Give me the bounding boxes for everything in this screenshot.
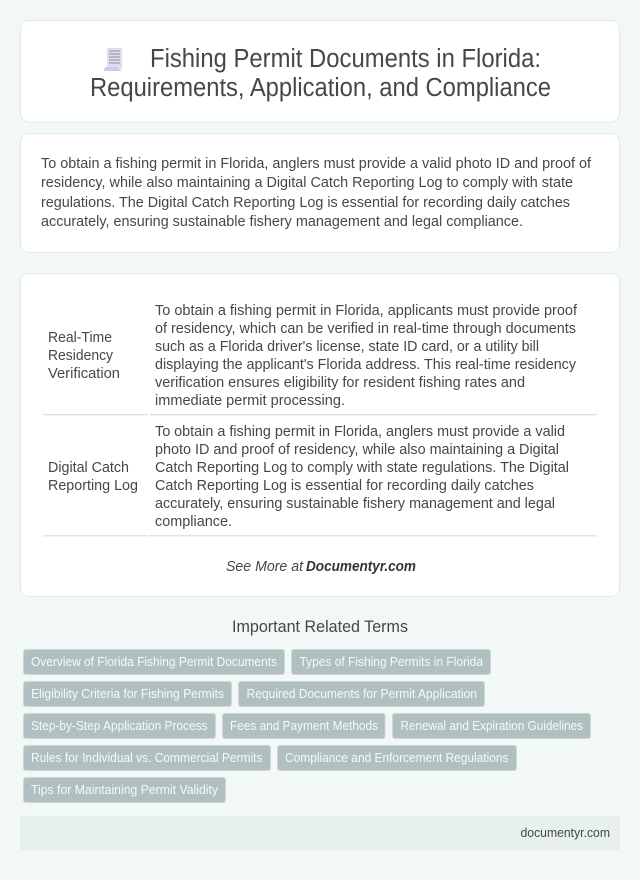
row description: To obtain a fishing permit in Florida, anglers must provide a valid <box>155 424 565 440</box>
row description <box>155 303 578 409</box>
tag <box>24 714 216 738</box>
footer bar: documentyr.com <box>520 826 610 840</box>
footer bar <box>20 816 620 850</box>
see more link: Documentyr.com <box>306 559 416 575</box>
panel: table card <box>20 274 620 596</box>
title <box>90 45 551 102</box>
tag: Tips for Maintaining Permit Validity <box>31 783 219 797</box>
icon: document scroll <box>104 48 122 71</box>
row label: Verification <box>48 366 120 382</box>
row description: displaying the applicant's Florida address. This real-time residency <box>155 357 577 373</box>
row label: Residency <box>48 348 114 364</box>
intro text <box>41 155 592 230</box>
tag <box>392 714 590 738</box>
intro text: regulations. The Digital Catch Reporting Log is essential for recording daily catches <box>41 194 570 211</box>
row description: of residency, which can be verified in real-time through documents <box>155 321 576 337</box>
panel: title card <box>20 20 620 122</box>
intro text: residency, while also maintaining a Digital Catch Reporting Log to comply with state <box>41 174 573 191</box>
row label: Digital Catch <box>48 460 129 476</box>
tag <box>278 746 516 770</box>
tag: Eligibility Criteria for Fishing Permits <box>31 687 224 701</box>
intro text: accurately, ensuring sustainable fishery management and legal compliance. <box>41 213 523 230</box>
title: Requirements, Application, and Compliance <box>90 74 551 102</box>
tag <box>222 714 385 738</box>
tag: Fees and Payment Methods <box>230 719 378 733</box>
tag <box>24 650 284 674</box>
tag: Required Documents for Permit Application <box>246 687 477 701</box>
row description: Catch Reporting Log is essential for recording daily catches <box>155 478 534 494</box>
row description: accurately, ensuring sustainable fishery management and legal <box>155 496 555 512</box>
heading: Important Related Terms: Important Related Terms <box>232 618 408 636</box>
see more link: See More at <box>226 559 304 575</box>
row label: Reporting Log <box>48 478 138 494</box>
tag <box>24 778 226 802</box>
row description: To obtain a fishing permit in Florida, applicants must provide proof <box>155 303 578 319</box>
table row: Real-Time Residency Verification <box>43 303 597 415</box>
row description: photo ID and proof of residency, while also maintaining a Digital <box>155 442 559 458</box>
row description: such as a Florida driver's license, state ID card, or a utility bill <box>155 339 539 355</box>
tag <box>292 650 490 674</box>
row description: compliance. <box>155 514 232 530</box>
row label <box>48 460 138 494</box>
row description: Catch Reporting Log to comply with state regulations. The Digital <box>155 460 569 476</box>
tag <box>238 682 484 706</box>
row description: immediate permit processing. <box>155 393 345 409</box>
tag: Compliance and Enforcement Regulations <box>285 751 508 765</box>
row label <box>48 330 120 382</box>
intro text: To obtain a fishing permit in Florida, anglers must provide a valid photo ID and proof of <box>41 155 592 172</box>
see more link <box>226 559 416 575</box>
tag <box>24 682 232 706</box>
table row: Digital Catch Reporting Log <box>43 424 597 536</box>
tag: Rules for Individual vs. Commercial Permits <box>31 751 262 765</box>
tag: Types of Fishing Permits in Florida <box>300 655 483 669</box>
tag: Step-by-Step Application Process <box>31 719 208 733</box>
row description <box>155 424 569 530</box>
tag: Renewal and Expiration Guidelines <box>400 719 583 733</box>
tag: Overview of Florida Fishing Permit Documents <box>31 655 277 669</box>
row description: verification ensures eligibility for resident fishing rates and <box>155 375 525 391</box>
tag <box>24 746 270 770</box>
title: Fishing Permit Documents in Florida: <box>150 45 541 73</box>
row label: Real-Time <box>48 330 112 346</box>
panel: introduction <box>20 134 620 252</box>
related terms tags <box>24 650 590 802</box>
